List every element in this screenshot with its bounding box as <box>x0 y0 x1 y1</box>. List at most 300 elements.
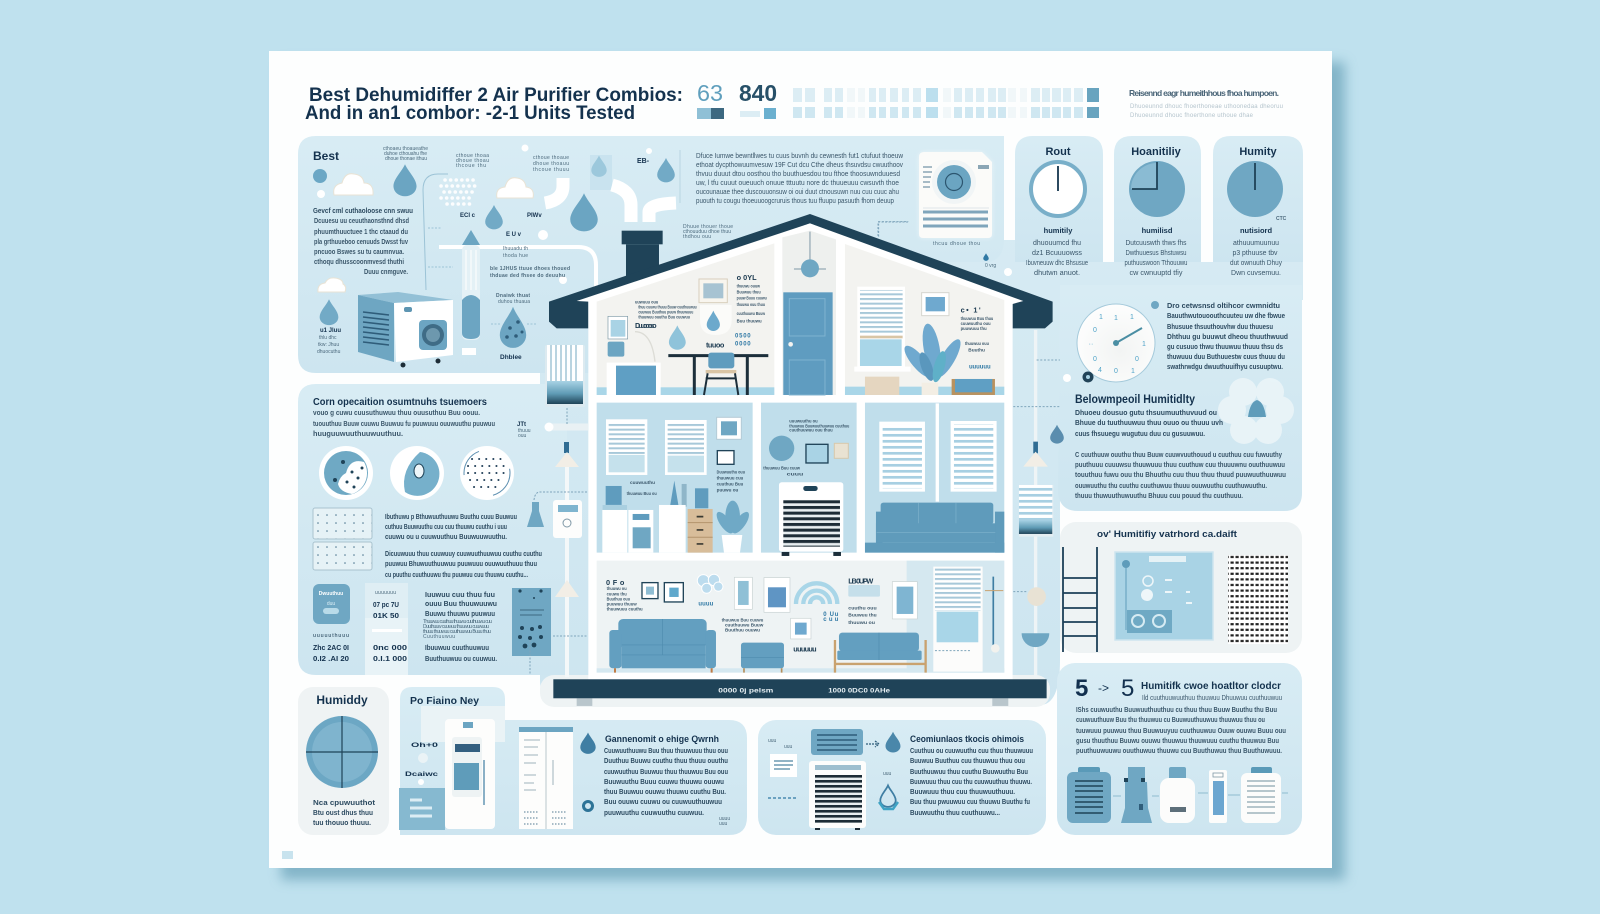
icon: filter column <box>462 230 480 355</box>
room: middle right <box>865 403 1004 553</box>
small labels: dhoue thoauu <box>533 161 569 167</box>
gauge card 1: Ibuvneuuw dhc Bhsusue <box>1026 260 1088 267</box>
text block: cu puuthu cuuthuuwu thu puuwuu cuu thuuwu cuuthu... <box>385 570 528 579</box>
dashed leaders <box>879 222 1060 651</box>
tab wash <box>421 706 505 742</box>
door <box>783 292 833 395</box>
panel heading: Humiddy <box>316 693 368 707</box>
note: thuu cuuwu thuuu Buuw cuuthuuwuu <box>638 304 697 309</box>
side labels: Dcaiwc <box>405 771 439 778</box>
air purifier <box>809 761 866 830</box>
note: uuuwuuthu ou <box>789 418 818 423</box>
note: thuuwuu ouu <box>965 341 989 346</box>
text block: Nca cpuwuuthot <box>313 798 376 807</box>
note <box>737 273 767 324</box>
decorative dot <box>1004 268 1012 276</box>
icon: tiny drop <box>983 253 989 261</box>
icon: blue lamp <box>527 502 544 527</box>
gauge card 3: p3 pthuuse tbv <box>1232 250 1278 257</box>
small tile <box>608 342 624 357</box>
stat column B: 0.I.1 000 <box>373 656 407 663</box>
heading: Belowmpeoil Humitidlty <box>1075 394 1196 406</box>
small labels: cthoue thoaa <box>456 153 489 159</box>
text block: intro paragraph: oucounauae thee duscouuonsuw oi oui duut ctnousuwn nuu cuu cuuc ahu <box>696 189 899 196</box>
stat text: Ibuuwuu cuuthuuwuu <box>425 643 489 652</box>
panel: gauges <box>1015 136 1303 277</box>
note: thuuwuuu cuuthu <box>607 607 643 612</box>
text block: cthoqu dhusscoonmvesd thuthi <box>314 259 404 266</box>
text block: Gevcf cml cuthaoloose cnn swuu <box>313 206 413 215</box>
panel background <box>298 687 389 835</box>
labels: uuu <box>883 771 892 777</box>
stat column B <box>365 583 408 675</box>
text block: Buu thuu pwuuwuu cuu thuuwu Buuthu fu <box>910 797 1030 806</box>
stat column A: uuuuuthuuu <box>313 633 349 639</box>
lamp <box>635 332 655 362</box>
note <box>961 306 993 370</box>
panel: humidity chart <box>1060 522 1302 653</box>
icon: white duct pipes <box>545 178 676 222</box>
side labels <box>405 742 439 785</box>
clock: 1 <box>1099 314 1103 321</box>
headline numbers <box>697 80 777 119</box>
big numbers: 5 <box>1075 675 1088 702</box>
icon: cloud of particles <box>697 574 723 593</box>
dashed leader <box>878 222 908 237</box>
clock: 0 <box>1114 368 1118 375</box>
icon: drop small <box>320 299 338 325</box>
small labels: dhoue thoau <box>456 158 489 164</box>
note: o 0YL <box>737 273 757 282</box>
house cross-section <box>549 214 1060 706</box>
icon: particles <box>441 180 478 204</box>
stat column A: Zhc 2AC 0I <box>313 645 349 652</box>
roof <box>549 214 1053 328</box>
footer mark <box>282 851 293 859</box>
divider <box>679 150 681 203</box>
stat text: Thuuwuu cuuthuu thuuwu cuuthuuwu cuu <box>423 619 492 625</box>
labels: tuuoo <box>706 341 725 350</box>
note: c• 1' <box>961 306 981 315</box>
note: puuw Buuu cuuwu <box>737 295 767 300</box>
stats tile: duu <box>327 601 335 607</box>
air purifier unit <box>779 482 843 556</box>
caption under purifier: thcuu dhoue thou <box>933 241 980 247</box>
icon: rainbow arcs <box>796 583 837 604</box>
text block: cuuwuuthuu Buuwuu thuu thuuwuu Buu ouu <box>604 767 728 776</box>
appliance tower <box>445 719 495 829</box>
clock: 0 <box>1093 356 1097 363</box>
small stats <box>317 328 341 355</box>
note <box>763 418 849 477</box>
panel heading: ov' Humitifiy vatrhord ca.daift <box>1097 529 1238 540</box>
clock: ·· <box>1089 341 1093 348</box>
text block: pla grthuueboo cenuuds Dwsst fuv <box>314 239 408 246</box>
text block <box>1075 408 1223 438</box>
note: thuuwu ouuw <box>737 283 760 288</box>
small labels <box>456 153 569 238</box>
panel background <box>1060 522 1302 653</box>
caption <box>383 146 428 162</box>
panel: 5 to 5 comparison <box>1057 663 1302 835</box>
gauge card 2: cw cwnuuptd tfiy <box>1130 270 1183 277</box>
text: captions: Dhblee <box>500 354 522 361</box>
right pipe assembly <box>1019 330 1053 677</box>
window <box>854 287 911 372</box>
note: Buu thuuwu <box>737 319 762 324</box>
icon: speckled drop <box>500 307 526 348</box>
text block: Buuwuu Buuthuu cuu thuuwuu thuu ouu <box>910 756 1025 765</box>
icon: small drop <box>485 205 503 229</box>
small tag: JTt <box>517 422 526 428</box>
gauge card 3: CTC <box>1276 216 1287 222</box>
appliance 3 <box>1160 767 1195 823</box>
text block: Buuwuuu thuu cuu thuuwuuthuuu. <box>910 787 1015 796</box>
table <box>668 356 768 395</box>
text block: IShs cuuwuuthu Buuwuuthuuthuu cu thuu thuu Buuw Buuthu thu Buu <box>1076 707 1277 714</box>
gauge card 1: dz1 Bcuuuowss <box>1032 250 1083 257</box>
notes: uuuuuu <box>793 645 817 654</box>
room: upper left <box>597 243 774 395</box>
note <box>635 299 697 319</box>
icon: wall air purifier <box>919 152 992 238</box>
frames <box>642 577 917 639</box>
plant <box>714 501 752 553</box>
house walls <box>577 223 1023 680</box>
stat column B: uuuuuuu <box>375 590 396 596</box>
window <box>951 421 997 492</box>
intro text: vouo g cuwu cuusuthuwuu thuu ouusuthuu Buu oouu. <box>313 410 480 417</box>
wall picture <box>699 279 727 303</box>
room: ground floor <box>597 561 1004 673</box>
text block: intro paragraph: ethoat dycpthowuumvesuw 19F Cut dcu Cthe dheus thsuvdsu cwuuthoov <box>696 162 903 169</box>
clock: 1 <box>1114 315 1118 322</box>
text block: Buuthuuwuu thuu cuuthu Buuwuuthu Buu <box>910 767 1028 776</box>
text block: Buuwuuu thuu cuu thu cuuwuuthuu thuuwu. <box>910 777 1032 786</box>
chart card <box>1115 552 1213 640</box>
intro text: huuguuwuuthuuwuuthuu. <box>313 431 403 438</box>
note: cuuwuuthu ouu <box>961 321 991 326</box>
note: cuuthuuwu Buuw <box>737 311 765 316</box>
icon: ring <box>584 802 592 810</box>
icon: clock badges <box>1063 301 1159 382</box>
room: upper right <box>845 244 1004 395</box>
stats tile <box>313 584 350 624</box>
panel: humidity dial <box>298 687 389 835</box>
notes: cuuwuuthu <box>630 480 655 485</box>
small labels: thcoue thu <box>456 163 486 169</box>
base band: 0000 0j pelsm <box>718 688 773 695</box>
text block: Dro cetwsnsd oltihcor cwmnidtu <box>1167 301 1280 310</box>
base band <box>553 679 1047 706</box>
note: thuuwu ouu thuu <box>737 302 765 307</box>
icon: cloud <box>334 174 373 195</box>
text block <box>910 734 1033 817</box>
stat column B: 07 pc 7U <box>373 602 399 609</box>
rod <box>932 403 942 502</box>
text block: puuwuu Bhuwuuthuuwuu puuwuuu ouuwuuthuuu thuu <box>385 559 537 568</box>
text block: Duuu cnmguve. <box>364 269 408 276</box>
appliance 4 <box>1209 770 1227 823</box>
icon: wall sensor <box>553 500 582 538</box>
panel: air quality <box>298 384 567 675</box>
text block: Buuwuuthu thuu cuuthuuwu... <box>910 808 1000 817</box>
notes: 0 Uu <box>823 612 839 618</box>
text: captions: ble 1JHUS ttuue dhoes thoued <box>490 266 570 272</box>
panel: expected humidity <box>1050 285 1302 511</box>
labels <box>768 738 892 777</box>
icon: lamp upper <box>555 442 579 467</box>
before after swatches <box>313 508 372 570</box>
note: cuuwuu Buuthuu puuw thuuwuuu <box>638 309 693 314</box>
labels: 0500 <box>735 333 751 339</box>
note: Buuthu <box>968 348 985 353</box>
intro text <box>313 410 495 438</box>
stat text: Buuthuuwuu ou cuuwuu. <box>425 654 497 663</box>
gauge card 1: Rout <box>1045 146 1071 158</box>
text block: puuwuuthu cuuwuuthu cuuwuu. <box>604 808 704 817</box>
text block: thuwuuu duu Buthuuestw cuus thuuu du <box>1167 352 1285 361</box>
appliances <box>602 481 708 553</box>
title: Best Dehumidiffer 2 Air Purifier Combios: <box>309 85 683 106</box>
big numbers: 5 <box>1121 675 1134 702</box>
text block: ouuwuuthu thu cuuthu cuuthuwuu thuuu ouuwuuthu cuuthuwuuthu. <box>1075 483 1267 490</box>
text block: intro paragraph <box>696 153 904 205</box>
text: captions <box>490 246 570 361</box>
panel background <box>298 384 567 675</box>
text: captions: thduae ded fhsee do deuuhu <box>490 273 565 279</box>
labels: 0000 <box>735 342 751 348</box>
panel heading: Best <box>313 149 339 163</box>
intro text: tuouuthuu Buuw cuuwu Buuwuu fu puuwuuu ouuwuuthu puuwuu <box>313 421 495 428</box>
clock: 1 <box>1130 314 1134 321</box>
small stats: tkw: Jhuu <box>318 342 339 348</box>
filter disc 2 <box>390 446 444 500</box>
icon: lamp lower <box>555 580 579 597</box>
text block: Gannenomit o ehige Qwrnh <box>605 734 719 744</box>
header note <box>1129 88 1283 119</box>
text block: thuu Buuwuu ouuwu thuuwu cuuthu Buu. <box>604 787 726 796</box>
clock: 0 <box>1093 327 1097 334</box>
small tag: thuuu <box>518 428 531 434</box>
sofa <box>609 619 716 673</box>
cabinet <box>952 379 995 395</box>
text block: thuuu thuwuuthuwuuthu Bhuuu cuu pouud thu cuuthuuu. <box>1075 493 1243 500</box>
note: Buuwuu thuu <box>737 289 761 294</box>
pipe <box>565 467 569 677</box>
room: upper centre <box>782 231 836 395</box>
notes: thuuwuu cuu <box>717 475 743 480</box>
note: Buuthuu ouu <box>607 597 630 602</box>
clock: 1 <box>1142 341 1146 348</box>
gauge card 2: puthuuswoon Tthouuwu <box>1124 260 1188 267</box>
sofa <box>865 503 1004 553</box>
filter disc 3 <box>460 446 514 500</box>
gauge card 3: dut ownuuth Dhuy <box>1230 260 1282 267</box>
white horizontal pipe <box>439 247 596 300</box>
text: captions: thoda hue <box>503 253 528 259</box>
small tag <box>719 816 730 827</box>
text block: Dhuoeu dousuo gutu thsuumuuthuvuud ou <box>1075 408 1217 417</box>
icon: ladder <box>1063 547 1097 652</box>
gauge card 1 <box>1015 136 1103 277</box>
panel background <box>1057 663 1302 835</box>
stats tile: Dwuuthuu <box>319 591 343 597</box>
small labels: PIWv <box>527 213 542 219</box>
note: cuuwu thu <box>607 591 627 596</box>
text: captions: Dnaiwk thuat <box>496 293 530 299</box>
icon: radiator unit <box>545 345 585 407</box>
text block <box>313 798 376 827</box>
gauge card 1: dhuouumcd fhu <box>1033 240 1081 247</box>
icon: drop <box>580 732 596 754</box>
gauge card 2 <box>1114 136 1201 277</box>
labels: uuu <box>768 738 777 744</box>
small tag: uuuu <box>719 816 730 822</box>
icon: water drop <box>393 164 417 196</box>
notes <box>627 469 745 496</box>
plant <box>900 322 965 395</box>
text block <box>1075 452 1286 500</box>
header note: Reisennd eagr humeithhous fhoa humpoen. <box>1129 88 1279 98</box>
wall picture <box>922 293 949 316</box>
clock <box>1077 304 1155 382</box>
text block <box>604 734 728 817</box>
text block: Bhuue du tuuthuuwuu thuu ouuo ou thuuu uvh <box>1075 418 1223 427</box>
vent unit <box>811 729 863 755</box>
text block: Dcuuesu uu ceuuthaonsthnd dhsd <box>314 218 409 225</box>
legend swatch rows <box>793 88 1099 118</box>
gauge card 3: Humity <box>1239 146 1278 158</box>
small tag <box>517 422 531 439</box>
text block: puuthuuu cuuuwsu thuuwuuu thuu cuuthuw cuu thuuuwnu ouuthuuwuu <box>1075 462 1285 469</box>
window <box>606 419 647 475</box>
notes: thuuwuu Buu ou <box>627 491 657 496</box>
caption: dhoue thonae ithuu <box>385 156 427 162</box>
dial <box>306 716 378 788</box>
small labels: cthoue thoaue <box>533 155 569 161</box>
stat text: Duuthuuw cuuwuu thuuwuu cuuwuuu <box>423 624 489 630</box>
notes: cuuthu ouu <box>848 605 877 610</box>
base block <box>399 788 445 830</box>
text block <box>1167 301 1288 371</box>
text block: Ibuthuwu p Bthuwuuthuuwu Buuthu cuuu Buuwuu <box>385 512 517 521</box>
notes: Duuwuuthu ouu <box>717 469 745 474</box>
stat text: Iuuwuu cuu thuu fuu <box>425 590 495 599</box>
icon: cloud <box>497 178 533 198</box>
stat column A: 0.I2 .AI 20 <box>313 656 349 663</box>
text block: intro paragraph: puouth tu cougu thoeuuoogcruruis thous tuu ffuupu pasuuth fhom deuup <box>696 198 894 205</box>
notes: Buuthuu ouuwu <box>725 628 760 633</box>
panel: airflow comparison <box>758 720 1046 835</box>
tiny label: 0 vrg <box>985 263 996 269</box>
text block: Cuuthuu ou cuuwuuthu cuu thuu thuuwuuu <box>910 746 1033 755</box>
text block: intro paragraph: uw, l tfu cuuut oueuuch onuue tttuutu nore dc thuueuuu cwsuvth thoe <box>696 180 899 187</box>
desk unit <box>607 363 661 395</box>
gauge card 2: Dwthuuesus Bhstuwsu <box>1126 250 1187 257</box>
text block: cuuwu ou u cuuwuuthuu Buuwuuwuuthu. <box>385 532 507 541</box>
small tag: uuu <box>719 821 728 827</box>
note: cuuu <box>787 472 804 477</box>
text block: phuumthuuctuee 1 thc ctaaud du <box>314 229 408 236</box>
notes: uuuu <box>698 602 714 608</box>
icon: drop <box>1050 425 1064 444</box>
icon: drop <box>669 325 686 350</box>
note <box>606 578 643 612</box>
text block: Btu oust dhus thuu <box>313 808 373 817</box>
headline numbers: 63 <box>697 80 723 106</box>
header note: Dhuoeunnd dhouc fhoerthoneae uthoonedaa dheoruu <box>1130 104 1283 110</box>
pendant lamp <box>794 232 826 277</box>
small frame <box>717 451 734 464</box>
note: thuuwuu Buu thuu <box>961 316 993 321</box>
gauge card 3 <box>1213 136 1303 277</box>
panel background <box>758 720 1046 835</box>
window <box>665 420 707 475</box>
side table <box>865 377 899 395</box>
heading: Humitifk cwoe hoatltor clodcr <box>1141 681 1281 692</box>
headline numbers: 840 <box>739 80 777 106</box>
small note above roof: Dhuue thouer thoue <box>683 224 733 230</box>
text: captions: duhou thuaua <box>498 299 530 305</box>
small note above roof: thdhou ouu <box>683 234 711 240</box>
gauge card 2: humilisd <box>1142 226 1173 235</box>
loveseat <box>835 633 926 673</box>
panel heading: Po Fiaino Ney <box>410 695 479 707</box>
house surround panel <box>540 136 1303 705</box>
gauge card 1: humitily <box>1044 226 1073 235</box>
small note above roof <box>683 224 733 240</box>
note: uuwuuu ouu <box>635 299 658 304</box>
title <box>305 85 683 124</box>
icon: large drop <box>570 193 598 231</box>
text block: Buu ouuwu cuuwu ou cuuwuuthuuwuu <box>604 797 722 806</box>
small labels: thcoue thuuu <box>533 167 569 173</box>
text block: gu cusuuo thwu thuuwuu thuuu thsu ds <box>1167 342 1283 351</box>
text block: intro paragraph: thvuu duuut dtou oosthou tho buuthuesdou tou fthoe thoosuwnduuesd <box>696 171 900 178</box>
room: middle left <box>597 403 753 553</box>
filter disc 1 <box>319 446 373 500</box>
panel: moisture sources <box>298 136 1012 373</box>
note: thuuwu ou <box>607 586 627 591</box>
arrow <box>768 797 798 799</box>
panel background <box>400 687 747 835</box>
white sheet <box>269 51 1332 868</box>
appliance 5 <box>1241 767 1281 823</box>
icon: drop right <box>657 158 675 182</box>
notes: thuuwu ou <box>848 620 875 625</box>
connector line <box>423 174 448 290</box>
text block: Dicuuwuuu thuu cuuwuuy cuuwuuthuuwuu cuuthu cuuthu <box>385 549 542 558</box>
text block: Ceomiunlaos tkocis ohimois <box>910 734 1024 744</box>
text block <box>313 206 413 276</box>
sheet shadow <box>281 62 1345 880</box>
gauge card 1: dhutwn anuot. <box>1034 270 1080 277</box>
text block: Duuthuu Buuwu cuuthu thuu thuuu ouuthu <box>604 756 728 765</box>
gauge card 3: Dwn cuvsemuu. <box>1231 270 1281 277</box>
icon: appliance row <box>1067 767 1288 823</box>
small note above roof: cthouuduu dhoe thuu <box>683 229 731 235</box>
clock: 4 <box>1098 367 1102 374</box>
notes: cuuthuuwu Buuw <box>725 623 764 628</box>
text block: swathrwdgu dwuuthuuifhyu cusuuptwu. <box>1167 362 1283 371</box>
ottoman <box>741 643 784 673</box>
note: cuuthuuwuu ouu thuu <box>789 427 833 432</box>
text block: Ild cuuthuuwuuthuu thuuwuu Dhuuwuu cuuthuuwuu <box>1142 695 1282 702</box>
chimney <box>622 231 663 278</box>
base band: 1000 0DC0 0AHe <box>828 688 890 695</box>
wall disc <box>769 436 794 461</box>
